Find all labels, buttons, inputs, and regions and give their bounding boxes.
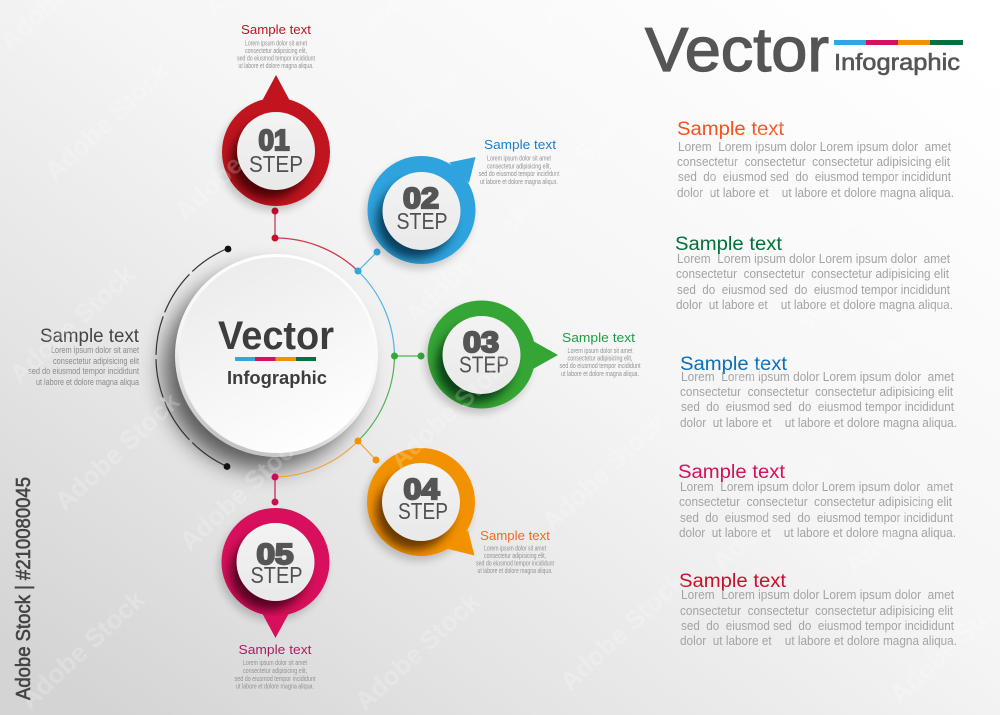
connector: step 2 blue	[354, 248, 394, 356]
watermark: Adobe Stock	[839, 449, 976, 579]
watermark: Adobe Stock	[39, 56, 176, 186]
step 5 caption	[234, 642, 316, 690]
step 4	[364, 448, 554, 575]
step 5 label	[250, 539, 302, 588]
step 5 caption: consectetur adipisicing elit,	[243, 666, 307, 675]
step 2 caption: ut labore et dolore magna aliqua.	[480, 177, 558, 186]
step 5 caption: Lorem ipsum dolor sit amet	[243, 658, 307, 667]
text block 1: Sample text	[677, 119, 785, 140]
watermark: Adobe Stock	[554, 566, 691, 696]
connector: step 1 red	[272, 208, 358, 271]
step 1 caption: Sample text	[241, 22, 311, 37]
step 5	[218, 508, 330, 690]
central colour bar	[235, 357, 316, 361]
left text block: sed do eiusmod tempor incididunt	[28, 366, 139, 376]
central circle	[175, 254, 378, 457]
step 4 label	[398, 474, 448, 524]
watermark: Adobe	[169, 149, 248, 226]
step 4 label: 04	[404, 474, 440, 506]
step 4 caption	[476, 528, 554, 575]
step 2 caption: Sample text	[484, 137, 556, 152]
black dashed arc	[156, 246, 231, 470]
step 4 caption: sed do eiusmod tempor incididunt	[476, 558, 554, 568]
text block 3: dolor ut labore et ut labore et dolore magna aliqua.	[680, 415, 957, 430]
step 1 label: STEP	[249, 151, 303, 177]
watermark: Adobe Stock	[4, 259, 141, 389]
text block 4: Sample text	[678, 462, 786, 483]
step 5 pin	[218, 508, 330, 638]
watermark: Adobe Stock	[384, 344, 521, 474]
step 5 caption: ut labore et dolore magna aliqua.	[236, 682, 314, 690]
connector: step 5 magenta	[272, 474, 278, 506]
step 5 caption: Sample text	[238, 642, 312, 657]
watermark: Adobe Stock	[674, 89, 811, 219]
watermark: Adobe Stock	[174, 426, 311, 556]
step 3 caption: sed do eiusmod tempor incididunt	[560, 361, 640, 370]
step 1 caption: Lorem ipsum dolor sit amet	[245, 38, 307, 48]
text block 2	[675, 234, 953, 312]
step 3 caption: ut labore et dolore magna aliqua.	[561, 369, 639, 378]
step 3 label	[459, 327, 509, 378]
text block 2: sed do eiusmod sed do eiusmod tempor incididunt	[677, 282, 950, 297]
text block 5: dolor ut labore et ut labore et dolore magna aliqua.	[680, 633, 957, 648]
text block 3	[680, 354, 957, 430]
left text block	[28, 326, 140, 387]
step 3 caption	[560, 330, 640, 378]
text block 2: Sample text	[675, 234, 783, 255]
text block 1: Lorem Lorem ipsum dolor Lorem ipsum dolor amet	[678, 139, 951, 154]
text block 5: sed do eiusmod sed do eiusmod tempor incididunt	[681, 618, 954, 633]
watermark: Adobe Stock	[706, 446, 843, 576]
title: Vector Infographic: Infographic	[834, 49, 960, 75]
connector: step 3 green	[358, 352, 424, 441]
step 3 label: STEP	[459, 352, 509, 378]
step 2 label: STEP	[396, 208, 448, 234]
text block 5: Lorem Lorem ipsum dolor Lorem ipsum dolor amet	[681, 587, 954, 602]
step 5 caption: sed do eiusmod tempor incididunt	[234, 674, 316, 683]
watermark: Adobe Stock	[399, 199, 536, 329]
step 3 label: 03	[463, 327, 499, 359]
step 2 caption: Lorem ipsum dolor sit amet	[487, 154, 551, 162]
text block 4: dolor ut labore et ut labore et dolore magna aliqua.	[679, 525, 956, 540]
text block 4: sed do eiusmod sed do eiusmod tempor incididunt	[680, 510, 953, 525]
step 4 caption: ut labore et dolore magna aliqua.	[478, 566, 552, 575]
text block 5: consectetur consectetur consectetur adipisicing elit	[680, 603, 953, 618]
step 4 label: STEP	[398, 498, 448, 524]
left text block: ut labore et dolore magna aliqua	[36, 377, 139, 387]
step 1 caption: consectetur adipisicing elit,	[245, 46, 307, 55]
central subheading: Infographic	[227, 367, 327, 388]
left text block: Lorem ipsum dolor sit amet	[51, 345, 139, 355]
step 3 caption: Sample text	[562, 330, 635, 345]
credit: vertical stock id: Adobe Stock | #210080045	[13, 477, 35, 700]
step 1 caption: ut labore et dolore magna aliqua.	[238, 61, 314, 70]
step 1	[219, 22, 330, 211]
step 2 pin	[364, 156, 476, 269]
text block 3: Lorem Lorem ipsum dolor Lorem ipsum dolor amet	[681, 369, 954, 384]
step 2 caption	[478, 137, 560, 186]
watermark: Adobe Stock	[724, 269, 861, 399]
text block 5: Sample text	[679, 571, 787, 592]
step 3 caption: consectetur adipisicing elit,	[568, 354, 632, 362]
text block 4: Lorem Lorem ipsum dolor Lorem ipsum dolor amet	[680, 479, 953, 494]
text block 2: Lorem Lorem ipsum dolor Lorem ipsum dolor amet	[677, 251, 950, 266]
text block 3: consectetur consectetur consectetur adipisicing elit	[680, 384, 953, 399]
step 3	[424, 300, 640, 414]
text block 5	[679, 571, 957, 648]
step 1 caption: sed do eiusmod tempor incididunt	[237, 54, 315, 62]
text block 1: dolor ut labore et ut labore et dolore magna aliqua.	[677, 185, 954, 200]
step 3 pin	[424, 300, 558, 414]
text block 2: dolor ut labore et ut labore et dolore magna aliqua.	[676, 297, 953, 312]
step 5 label: 05	[256, 539, 294, 571]
watermark: Adobe Stock	[504, 99, 641, 229]
step 2 caption: sed do eiusmod tempor incididunt	[478, 169, 560, 178]
central circle shadow	[164, 271, 362, 469]
watermark: Adobe Stock	[536, 406, 673, 536]
step 2 caption: consectetur adipisicing elit,	[487, 162, 551, 170]
step 2 label	[396, 183, 448, 234]
watermark: Adobe	[384, 62, 463, 139]
text block 1: sed do eiusmod sed do eiusmod tempor incididunt	[678, 169, 951, 184]
connector: step 4 orange	[275, 438, 380, 477]
step 1 label	[249, 125, 303, 177]
watermark: Adobe Stock	[49, 386, 186, 516]
title: Vector Infographic	[645, 16, 963, 85]
watermark: Adobe Stock	[349, 586, 486, 715]
text block 1	[677, 119, 954, 200]
watermark: Adobe	[829, 165, 908, 242]
left text block: Sample text	[40, 326, 140, 347]
step 4 caption: Lorem ipsum dolor sit amet	[484, 544, 546, 552]
step 4 pin	[364, 448, 475, 561]
step 1 pin	[219, 75, 330, 211]
text block 3: Sample text	[680, 354, 788, 375]
step 1 label: 01	[258, 125, 290, 157]
text block 4: consectetur consectetur consectetur adipisicing elit	[679, 494, 952, 509]
step 5 label: STEP	[250, 562, 302, 588]
step 4 caption: consectetur adipisicing elit,	[484, 551, 546, 560]
text block 3: sed do eiusmod sed do eiusmod tempor incididunt	[681, 399, 954, 414]
text block 1: consectetur consectetur consectetur adipisicing elit	[677, 154, 950, 169]
step 4 caption: Sample text	[480, 528, 550, 543]
text block 2: consectetur consectetur consectetur adipisicing elit	[676, 266, 949, 281]
central heading: Vector	[218, 314, 334, 358]
step 2	[364, 137, 560, 269]
title: Vector Infographic: Vector	[645, 16, 829, 85]
text block 4	[678, 462, 956, 540]
left text block: consectetur adipisicing elit	[53, 356, 139, 366]
step 3 caption: Lorem ipsum dolor sit amet	[568, 346, 632, 355]
step 1 caption	[237, 22, 315, 70]
step 2 label: 02	[403, 183, 439, 215]
watermark: Adobe Stock	[14, 584, 151, 714]
